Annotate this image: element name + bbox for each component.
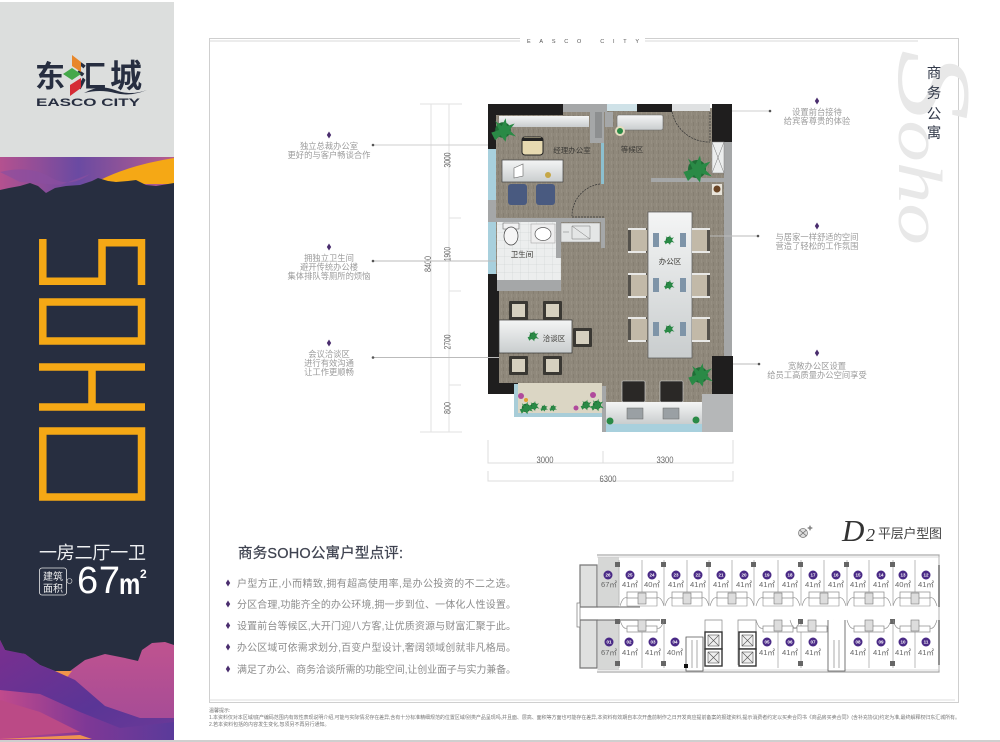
unit badges top row [601,570,934,589]
disclaimer: 1.本资料仅对本区域/底产编码范围内有效性表现说明介绍,可能与实际情况存在差异,含有十分标准精细规范的位置区域/别类产品呈现吗,并且面、层高、面积等方面也可能存在差异,本资料有效期自本次开盘前制作之日开发商应提前备案的报建资料,提示消费者约定以买卖合同书《商品房买卖合同》(含补充协议)约定为准,最终解释权归东汇城所有。 [209,714,960,721]
unit badges bottom row: 41㎡ [895,648,911,657]
main frame [210,38,958,702]
callout: meeting area [304,340,499,377]
callout: private bathroom [288,244,496,281]
review bullets: 设置前台等候区,大开门迎八方客,让优质资源与财富汇聚于此。 [237,620,516,632]
bathroom: 卫生间 [511,249,533,259]
unit badges top row: 41㎡ [873,580,889,589]
category label [927,65,941,142]
floor plan [488,104,733,432]
door arcs [530,112,710,276]
unit badges bottom row: 03 [650,640,656,644]
unit badges top row: 19 [764,572,770,578]
unit badges top row: 23 [673,572,679,578]
review bullets: 分区合理,功能齐全的办公环境,拥一步到位、一体化人性设置。 [237,598,516,611]
callout: meeting area: 让工作更顺畅 [304,367,354,377]
unit badges top row: 41㎡ [736,580,752,589]
unit badges bottom row: 04 [672,640,678,644]
unit badges bottom row: 41㎡ [850,648,866,657]
unit type: 一房二厅一卫 [39,543,146,563]
building area badge: 面积 [43,583,63,595]
building area badge: 建筑 [43,570,63,583]
logo: 东 [35,61,65,94]
unit badges bottom row: 41㎡ [645,648,661,657]
unit badges top row: 26 [605,572,611,578]
manager office furniture [491,116,589,205]
callout: meeting area: 会议洽谈区 [308,349,350,359]
unit badges bottom row: 41㎡ [873,648,889,657]
callout: private bathroom: 集体排队等厕所的烦恼 [288,271,370,281]
dimension lines bottom: 6300 [600,474,616,484]
meeting area: 洽谈区 [543,333,566,343]
category label: 公 [927,107,941,123]
unit badges top row: 40㎡ [644,580,660,589]
reception [615,115,724,195]
unit badges bottom row: 05 [764,640,770,644]
balcony [514,383,604,417]
unit badges top row: 24 [649,572,655,578]
unit badges top row: 17 [810,572,816,578]
unit badges bottom row [601,638,934,657]
unit badges top row: 41㎡ [668,580,684,589]
frame caption: EASCO CITY [527,39,639,45]
dimension lines bottom: 3000 [536,455,554,465]
callout: private bathroom: 拥独立卫生间 [304,253,354,263]
review bullets: 户型方正,小而精致,拥有超高使用率,是办公投资的不二之选。 [237,577,516,590]
unit badges bottom row: 40㎡ [667,648,683,657]
key plan structure [577,555,939,672]
front workstations [606,363,713,432]
walls [488,104,733,432]
callout: homelike space: 与居家一样舒适的空间 [776,232,858,242]
unit badges bottom row: 08 [855,640,861,644]
unit badges top row: 15 [855,572,861,578]
SOHO vertical title [39,239,145,497]
unit badges top row: 41㎡ [690,580,706,589]
unit badges top row: 41㎡ [918,580,934,589]
logo: 城 [110,58,142,94]
area value: 67 [77,560,120,602]
manager office label: 经理办公室 [553,145,591,155]
soho script watermark: S oho [876,50,993,245]
unit badges top row: 25 [627,572,633,578]
office desk: 办公区 [659,256,682,266]
unit badges bottom row: 41㎡ [782,648,798,657]
dimension lines left [420,104,462,432]
building area badge [40,568,72,595]
category label: 寓 [927,124,941,142]
callout: homelike space: 营造了轻松的工作氛围 [776,241,858,251]
dimension lines bottom: 3300 [656,455,674,465]
floor plan title: 2 [866,525,875,545]
callout: homelike space [710,222,858,251]
unit badges top row: 13 [900,572,906,578]
unit badges top row: 14 [878,572,884,578]
callout: reception [732,98,851,126]
top mountain band [0,157,174,200]
floor plan title: D [841,513,864,548]
unit badges top row: 40㎡ [895,580,911,589]
dimension lines left: 800 [442,402,452,414]
unit badges bottom row: 09 [878,640,884,644]
callout: president office: 独立总裁办公室 [300,141,358,151]
disclaimer: 温馨提示: [209,707,230,714]
unit badges bottom row: 02 [626,640,632,644]
bathroom [497,222,600,291]
unit badges bottom row: 41㎡ [918,648,934,657]
unit badges top row: 20 [741,572,747,578]
dimension lines left: 2700 [442,334,452,350]
dimension lines left: 1900 [442,247,452,261]
unit badges bottom row: 11 [924,640,929,644]
category label: 商 [927,65,941,82]
callout: spacious office: 给员工高质量办公空间享受 [767,370,867,380]
unit badges bottom row: 41㎡ [759,648,775,657]
unit badges bottom row: 67㎡ [601,648,617,657]
unit badges bottom row: 10 [900,640,906,644]
unit badges top row: 21 [718,572,724,578]
unit badges bottom row: 01 [606,640,612,644]
callout: spacious office [733,350,867,380]
meeting area [499,301,592,375]
floor plan title [841,513,942,548]
unit badges top row: 41㎡ [759,580,775,589]
unit badges top row: 67㎡ [601,580,617,589]
unit badges top row: 41㎡ [713,580,729,589]
left sidebar [0,2,174,740]
floor plan title: 平层户型图 [878,526,942,541]
review bullets [226,577,516,676]
key plan [577,555,939,672]
review bullets: 满足了办公、商务洽谈所需的功能空间,让创业面子与实力兼备。 [237,663,516,676]
dimension lines left: 8400 [423,256,433,272]
logo: 汇 [76,61,106,94]
unit badges top row: 41㎡ [828,580,844,589]
unit badges top row: 16 [833,572,839,578]
callout: president office [288,132,488,160]
callout: private bathroom: 避开传统办公楼 [300,262,358,272]
unit badges bottom row: 41㎡ [622,648,638,657]
bottom mountains [0,640,174,740]
dimension lines left: 3000 [442,152,452,168]
logo [35,55,147,109]
category label: 务 [927,85,941,102]
callout: reception: 给宾客尊贵的体验 [784,116,851,126]
logo: EASCO CITY [36,97,141,109]
unit badges top row: 22 [695,572,701,578]
icon: compass [798,525,813,538]
unit badges top row: 41㎡ [782,580,798,589]
area value [77,560,147,602]
review panel [226,544,516,676]
area value: m [119,566,140,601]
unit badges bottom row: 07 [810,640,816,644]
callout: spacious office: 宽敞办公区设置 [788,361,846,371]
disclaimer: 2.若本资料包括的内容发生变化,恕须另不再另行通知。 [209,721,330,728]
callout: reception: 设置前台接待 [792,107,842,117]
unit badges top row: 18 [787,572,793,578]
unit badges top row: 41㎡ [850,580,866,589]
callout: president office: 更好的与客户畅谈合作 [288,150,370,160]
unit badges top row: 41㎡ [805,580,821,589]
unit badges bottom row: 41㎡ [805,648,821,657]
unit badges top row: 12 [923,572,929,578]
office desk [628,212,710,358]
review bullets: 办公区域可依需求划分,百变户型设计,奢阔领域创就非凡格局。 [237,641,516,654]
review heading: 商务SOHO公寓户型点评: [238,544,403,562]
disclaimer [209,707,960,728]
unit badges top row: 41㎡ [622,580,638,589]
dimension lines bottom [488,440,733,484]
waiting area label: 等候区 [621,144,644,154]
callout: meeting area: 进行有效沟通 [304,358,355,368]
unit badges bottom row: 06 [787,640,793,644]
floor [492,108,728,403]
area value: 2 [140,567,147,581]
